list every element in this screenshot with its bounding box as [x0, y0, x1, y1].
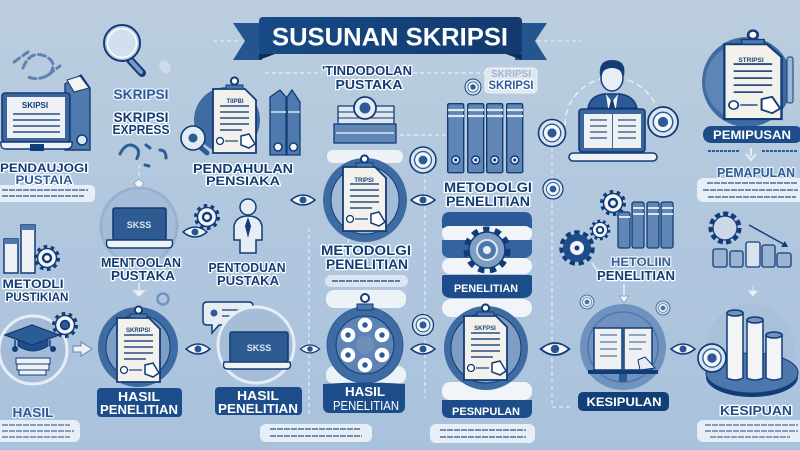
badge: hasil penelitian 3: PENELITIAN	[333, 399, 399, 413]
text strip 1	[0, 185, 95, 202]
label: hetoliin penelitian: PENELITIAN	[597, 268, 675, 283]
icon: book stack	[334, 97, 396, 143]
panel: laptop skripsi top left: SKIPSI	[22, 101, 48, 110]
text strip 3	[260, 424, 372, 442]
panel: network circle	[326, 290, 406, 384]
text strip 2	[0, 420, 80, 442]
panel: doc pemipusan: STRIPSI	[738, 57, 764, 64]
eye connector	[300, 345, 320, 353]
panel: laptop skss: SKSS	[127, 220, 151, 230]
label: pentoduan pustaka: PUSTAKA	[217, 273, 280, 288]
panel: doc pendahuluan	[181, 77, 300, 155]
badge: kesipulan	[578, 392, 669, 411]
label: mentoolan pustaka	[101, 255, 181, 283]
label: skripsi small: SKRIPSI	[491, 69, 531, 80]
badge: hasil penelitian 3	[323, 382, 405, 413]
label: pendahulan pensiaka	[193, 161, 293, 188]
panel: graduation cap	[0, 316, 67, 384]
arrow divider	[708, 148, 798, 160]
label: skripsi express: SKRIPSI	[114, 86, 168, 102]
label: metodologi penelitian center: METODOLGI	[321, 243, 411, 258]
arrow	[73, 342, 92, 356]
badge: pemipusan	[703, 126, 800, 143]
label: metodolgi penelitian: PENELITIAN	[446, 194, 530, 209]
label: pendaujogi pustaia: PENDAUJOGI	[0, 161, 88, 175]
panel: bars left	[4, 225, 58, 273]
badge: hasil penelitian 1	[97, 388, 182, 417]
panel: doc tripsi: TRIPSI	[354, 178, 374, 184]
eye connector	[541, 343, 569, 355]
label: hetoliin penelitian: HETOLIIN	[611, 255, 671, 269]
eye connector	[186, 344, 210, 354]
badge: hasil penelitian 2	[215, 387, 302, 416]
arrow down	[749, 285, 757, 296]
label: metodolgi penelitian	[444, 180, 532, 209]
connector lines	[139, 41, 582, 417]
panel: doc hasil penelitian	[98, 306, 178, 387]
label: skripsi small: SKRIPSI	[488, 78, 534, 92]
label: metodologi penelitian center: PENELITIAN	[326, 257, 408, 272]
panel: laptop skss 2: SKSS	[247, 343, 271, 353]
arrow down	[619, 284, 629, 303]
badge: hasil penelitian 1: PENELITIAN	[100, 403, 178, 417]
disk	[412, 314, 434, 336]
label: hetoliin penelitian	[597, 255, 675, 283]
label: metodli pustikian: PUSTIKIAN	[6, 290, 68, 304]
label: metodolgi penelitian: METODOLGI	[444, 180, 532, 195]
arrow down	[134, 179, 144, 190]
label: tindodolan pustaka: PUSTAKA	[336, 77, 403, 92]
text strip 4	[325, 275, 408, 287]
text strip 5	[430, 424, 535, 443]
badge: kesipulan: KESIPULAN	[586, 395, 662, 409]
icon: scribble	[120, 145, 166, 166]
panel: cylinder stack: PESNPULAN	[452, 406, 520, 418]
label: pemapulan: PEMAPULAN	[717, 166, 795, 180]
label: kesipuan: KESIPUAN	[720, 403, 792, 418]
panel: laptop skss 2	[218, 307, 294, 383]
panel: doc skrpsi: SKFPSI	[474, 326, 496, 332]
panel: doc pendahuluan: TIIPBI	[226, 99, 244, 105]
label: pendaujogi pustaia	[0, 161, 88, 187]
label: pentoduan pustaka	[208, 260, 286, 288]
label: skripsi small	[465, 68, 537, 95]
label: hasil left: HASIL	[12, 405, 54, 420]
badge: hasil penelitian 3: HASIL	[345, 385, 385, 399]
icon: speech bubble	[203, 302, 253, 333]
icon: person	[234, 199, 262, 253]
label: skripsi express	[112, 86, 170, 137]
ring	[580, 295, 594, 309]
icon: binders	[448, 104, 523, 173]
badge: hasil penelitian 2: PENELITIAN	[218, 402, 298, 416]
label: skripsi express: SKRIPSI	[114, 109, 168, 125]
panel: open book	[580, 304, 666, 390]
label: pentoduan pustaka: PENTODUAN	[208, 260, 286, 275]
label: skripsi express: EXPRESS	[112, 122, 170, 137]
label: metodologi penelitian center	[321, 243, 411, 272]
panel: doc hasil penelitian: SKRIPSI	[126, 328, 150, 334]
icon: gear blob	[54, 314, 76, 336]
icon: eye	[183, 227, 207, 237]
icon: gears and binders	[562, 192, 673, 275]
panel: laptop skripsi top left	[1, 52, 90, 151]
label: tindodolan pustaka	[322, 63, 412, 92]
label: metodli pustikian: METODLI	[2, 277, 64, 291]
label: pendahulan pensiaka: PENDAHULAN	[193, 161, 293, 176]
panel: doc tripsi	[323, 150, 407, 242]
disk	[543, 179, 563, 199]
panel: cylinder stack: PENELITIAN	[454, 283, 518, 295]
panel: doc pemipusan	[702, 31, 793, 127]
panel: cylinder chart	[698, 304, 798, 397]
eye connector	[671, 344, 695, 354]
disk	[648, 107, 678, 137]
panel: doc skrpsi	[444, 304, 528, 390]
label: mentoolan pustaka: PUSTAKA	[111, 268, 176, 283]
arrow down	[134, 283, 144, 296]
ring	[656, 301, 670, 315]
badge: hasil penelitian 1: HASIL	[118, 390, 160, 404]
label: metodli pustikian	[2, 277, 68, 304]
label: pendaujogi pustaia: PUSTAIA	[16, 173, 73, 187]
panel: cylinder stack	[442, 212, 532, 418]
icon: eye	[411, 195, 435, 205]
icon: disk	[410, 147, 436, 173]
eye connector	[411, 344, 435, 354]
label: mentoolan pustaka: MENTOOLAN	[101, 255, 181, 270]
disk	[538, 120, 566, 146]
badge: pemipusan: PEMIPUSAN	[713, 128, 791, 142]
label: pendahulan pensiaka: PENSIAKA	[206, 174, 280, 188]
icon: ring	[158, 294, 168, 304]
text strip 6	[697, 178, 800, 202]
icon: magnifier	[104, 25, 173, 76]
title banner	[233, 17, 547, 60]
text strip 7	[697, 420, 800, 442]
label: tindodolan pustaka: 'TINDODOLAN	[322, 63, 412, 78]
badge: hasil penelitian 2: HASIL	[237, 389, 279, 403]
panel: laptop skss	[101, 188, 177, 264]
icon: gear with declining bars	[711, 214, 791, 267]
title: SUSUNAN SKRIPSI	[272, 24, 508, 52]
icon: eye	[291, 195, 315, 205]
panel: person with laptop	[565, 60, 660, 161]
icon: gear	[196, 206, 218, 228]
